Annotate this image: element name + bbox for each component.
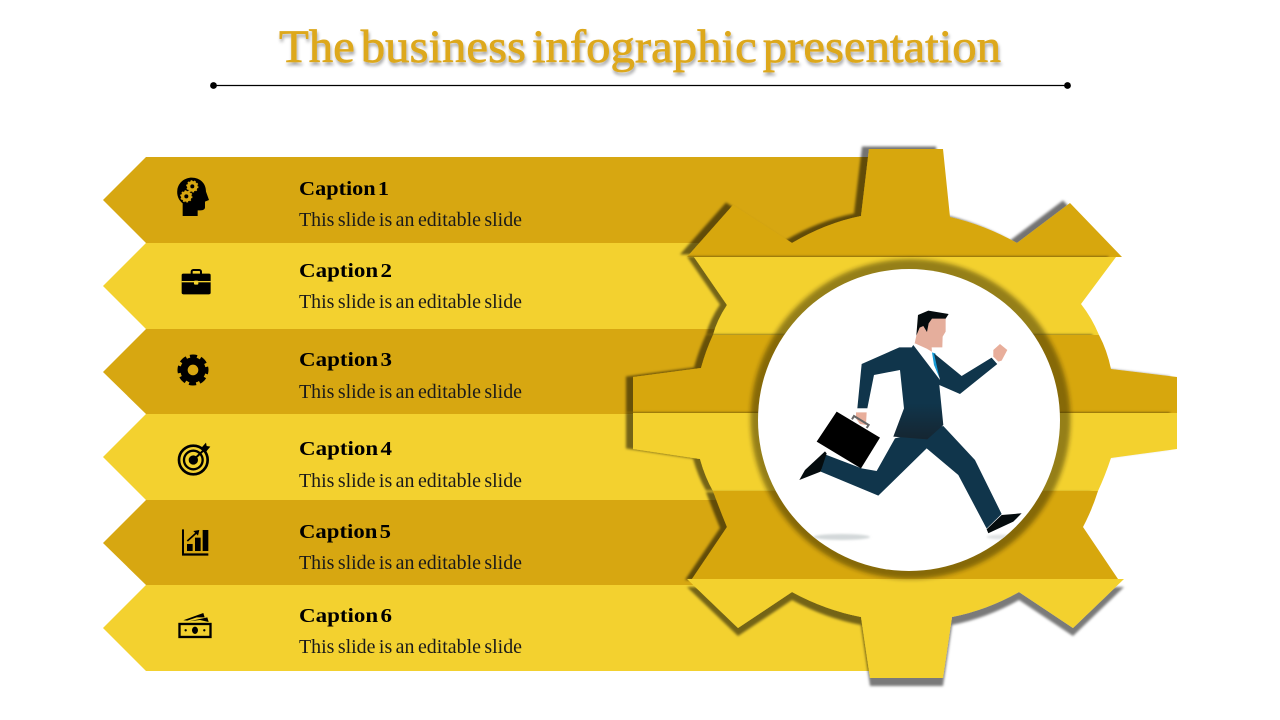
caption 2 heading: Caption 2 bbox=[299, 260, 392, 282]
caption 1 heading: Caption 1 bbox=[299, 178, 389, 200]
caption 1 text: This slide is an editable slide bbox=[299, 209, 522, 231]
caption 4 text: This slide is an editable slide bbox=[299, 470, 522, 492]
caption 2 text: This slide is an editable slide bbox=[299, 291, 522, 313]
panel: caption 5 band bbox=[103, 500, 880, 585]
back and front legs bbox=[821, 426, 1002, 529]
caption 3 heading: Caption 3 bbox=[299, 349, 392, 371]
panel: caption 4 band bbox=[103, 414, 880, 500]
caption 4 heading: Caption 4 bbox=[299, 438, 392, 460]
title divider with end dots bbox=[210, 82, 1071, 89]
panel: caption 2 band bbox=[103, 243, 880, 329]
caption 3 text: This slide is an editable slide bbox=[299, 381, 522, 403]
infographic canvas bbox=[103, 28, 1177, 688]
gear made of six stacked strips bbox=[633, 149, 1177, 678]
icon: banknotes bbox=[179, 613, 210, 637]
jacket bbox=[857, 345, 997, 439]
title: The business infographic presentation bbox=[279, 21, 1001, 73]
white circle holding figure bbox=[758, 269, 1060, 571]
icon: gear bbox=[177, 354, 209, 386]
caption 5 text: This slide is an editable slide bbox=[299, 552, 522, 574]
caption 5 heading: Caption 5 bbox=[299, 521, 391, 543]
panel: caption 1 band bbox=[103, 157, 880, 243]
icon: rising bar chart bbox=[182, 529, 208, 556]
panel: caption 3 band bbox=[103, 329, 880, 414]
panel: caption 6 band bbox=[103, 585, 880, 671]
caption 6 heading: Caption 6 bbox=[299, 605, 392, 627]
briefcase bbox=[852, 416, 869, 428]
icon: head with gears bbox=[177, 178, 209, 216]
head bbox=[915, 318, 946, 352]
icon: target with arrow bbox=[179, 443, 210, 474]
caption 6 text: This slide is an editable slide bbox=[299, 636, 522, 658]
illustration: running businessman bbox=[799, 311, 1022, 540]
circle inner shadow ring bbox=[750, 259, 1070, 579]
icon: briefcase bbox=[182, 270, 211, 294]
